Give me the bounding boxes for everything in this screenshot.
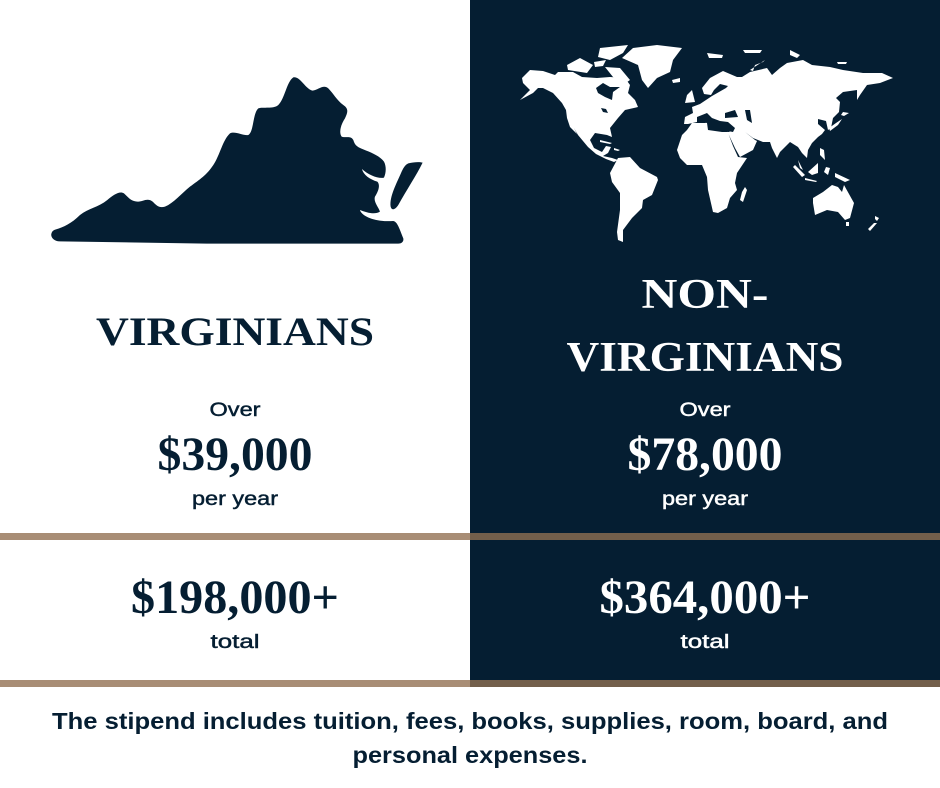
Black Sea <box>725 110 738 118</box>
stat: Virginians per year <box>158 400 312 510</box>
Hudson Bay <box>596 83 620 100</box>
footnote <box>52 708 888 768</box>
heading: Virginians: VIRGINIANS <box>96 309 374 354</box>
Iceland <box>672 78 680 83</box>
divider band lower <box>0 680 940 687</box>
South America <box>610 157 658 242</box>
heading: Non-Virginians <box>566 272 844 381</box>
stat: Non-Virginians per year: per year <box>662 489 749 510</box>
North and Central America <box>520 70 638 162</box>
stat: Non-Virginians per year: Over <box>680 400 731 421</box>
heading: Non-Virginians: NON- <box>642 272 768 318</box>
Greenland <box>622 45 682 88</box>
stat: Non-Virginians total: $364,000+ <box>600 571 810 624</box>
icon: Virginia state map <box>51 77 423 244</box>
divider band upper <box>0 533 940 540</box>
Caspian Sea <box>745 110 752 123</box>
stat: Non-Virginians total <box>600 571 810 653</box>
stat: Non-Virginians per year: $78,000 <box>628 428 782 481</box>
Great Lakes <box>601 108 608 113</box>
stat: Virginians total: $198,000+ <box>131 571 339 624</box>
Eurasia and Africa <box>677 60 893 213</box>
stat: Virginians total: total <box>210 632 260 653</box>
heading: Non-Virginians: VIRGINIANS <box>566 335 844 381</box>
stat: Virginians total <box>131 571 339 653</box>
New Zealand and Tasmania <box>846 216 879 231</box>
Australia <box>813 185 854 220</box>
islands: UK, Japan, Madagascar, Indonesia and others <box>600 50 850 202</box>
panel: non-Virginians background <box>470 0 940 687</box>
stat: Virginians per year: per year <box>192 489 279 510</box>
Arctic islands of Canada <box>567 45 630 85</box>
stat: Non-Virginians per year <box>628 400 782 510</box>
footnote: personal expenses. <box>352 742 588 768</box>
Mediterranean Sea <box>697 113 735 132</box>
icon: world map <box>520 45 893 242</box>
footnote: The stipend includes tuition, fees, books, supplies, room, board, and <box>52 708 888 734</box>
stat: Non-Virginians total: total <box>680 632 730 653</box>
stat: Virginians per year: Over <box>210 400 261 421</box>
stat: Virginians per year: $39,000 <box>158 428 312 481</box>
